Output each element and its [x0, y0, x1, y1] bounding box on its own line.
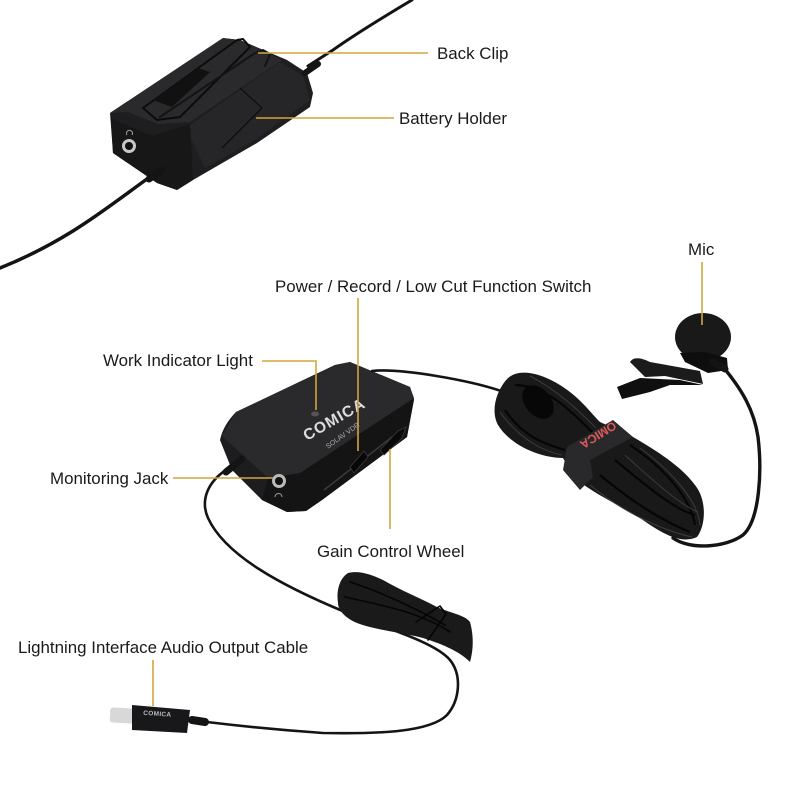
cable loop [337, 572, 473, 662]
cable: coil to mic [673, 368, 760, 546]
brand text: COMICA [300, 395, 369, 444]
lapel clip [617, 358, 703, 399]
label: Lightning Interface Audio Output Cable: Lightning Interface Audio Output Cable [18, 638, 308, 657]
strain relief [149, 170, 162, 179]
function switch [350, 451, 368, 473]
monitoring jack on back [122, 139, 136, 153]
label: Battery Holder: Battery Holder [399, 109, 507, 128]
cable: unit to coil [372, 371, 504, 392]
work indicator light [311, 412, 319, 416]
lightning cable [205, 470, 473, 733]
label: Gain Control Wheel: Gain Control Wheel [317, 542, 464, 561]
back unit: battery holder body [110, 38, 318, 190]
front unit: body: SOLAV VDR [325, 422, 361, 451]
back clip wire [143, 39, 250, 120]
velcro strap [563, 420, 633, 490]
mic windscreen [675, 313, 731, 373]
cable coil: OMICA [577, 418, 619, 452]
label: Back Clip: Back Clip [437, 44, 508, 63]
strain relief [226, 459, 242, 472]
lightning connector: COMICA [143, 710, 172, 719]
label: Work Indicator Light: Work Indicator Light [103, 351, 253, 370]
label: Power / Record / Low Cut Function Switch: Power / Record / Low Cut Function Switch [275, 277, 591, 296]
lightning connector [110, 705, 205, 733]
back unit cable [0, 0, 412, 268]
label: Mic [688, 240, 714, 325]
label: Monitoring Jack: Monitoring Jack [50, 469, 169, 488]
label: Work Indicator Light [103, 351, 316, 410]
gain control wheel [380, 427, 406, 455]
monitoring jack [272, 474, 286, 488]
cable coil [495, 373, 704, 539]
front unit: body [220, 362, 414, 512]
label: Mic: Mic [688, 240, 714, 259]
